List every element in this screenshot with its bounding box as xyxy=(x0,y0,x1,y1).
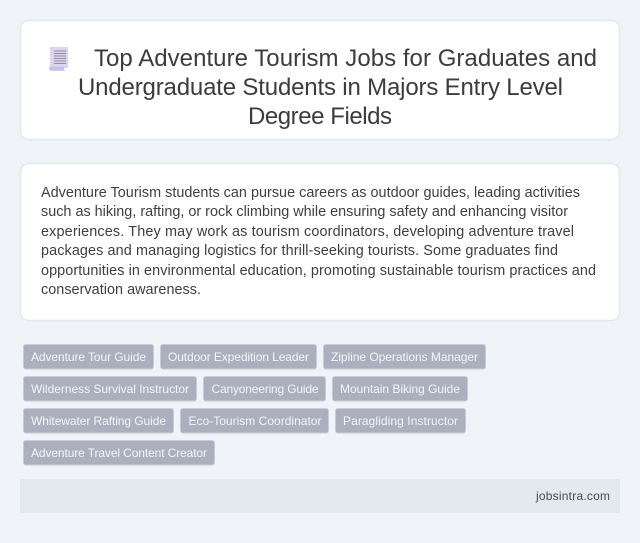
tag: Adventure Travel Content Creator: Adventure Travel Content Creator xyxy=(31,446,207,460)
tag: Whitewater Rafting Guide xyxy=(24,408,174,433)
description text: packages and managing logistics for thrill-seeking tourists. Some graduates find xyxy=(41,243,558,259)
panel: title xyxy=(20,20,620,140)
tag: Whitewater Rafting Guide: Whitewater Rafting Guide xyxy=(31,414,166,428)
tag: Outdoor Expedition Leader: Outdoor Expedition Leader xyxy=(168,350,309,364)
tag: Adventure Travel Content Creator xyxy=(24,440,214,465)
tag: Zipline Operations Manager: Zipline Operations Manager xyxy=(331,350,478,364)
description text: opportunities in environmental education, promoting sustainable tourism practices and xyxy=(41,263,596,279)
tag: Mountain Biking Guide xyxy=(332,376,468,401)
description text xyxy=(41,185,596,298)
tag: Wilderness Survival Instructor: Wilderness Survival Instructor xyxy=(31,382,189,396)
title text: Degree Fields xyxy=(248,103,392,130)
tag: Outdoor Expedition Leader xyxy=(160,344,316,369)
description text: such as hiking, rafting, or rock climbing while ensuring safety and enhancing visitor xyxy=(41,204,568,220)
job tags xyxy=(24,344,486,465)
description text: Adventure Tourism students can pursue careers as outdoor guides, leading activities xyxy=(41,185,580,201)
tag: Paragliding Instructor: Paragliding Instructor xyxy=(343,414,458,428)
tag: Adventure Tour Guide: Adventure Tour Guide xyxy=(31,350,146,364)
tag: Wilderness Survival Instructor xyxy=(24,376,196,401)
footer text: jobsintra.com xyxy=(535,489,610,503)
icon: receipt scroll xyxy=(49,48,68,71)
tag: Canyoneering Guide: Canyoneering Guide xyxy=(212,382,319,396)
title text: Undergraduate Students in Majors Entry Level xyxy=(78,74,563,101)
footer xyxy=(20,479,620,513)
tag: Canyoneering Guide xyxy=(204,376,326,401)
tag: Eco-Tourism Coordinator xyxy=(180,408,328,433)
tag: Paragliding Instructor xyxy=(336,408,466,433)
tag: Zipline Operations Manager xyxy=(324,344,486,369)
tag: Mountain Biking Guide: Mountain Biking Guide xyxy=(340,382,460,396)
tag: Adventure Tour Guide xyxy=(24,344,154,369)
description text: conservation awareness. xyxy=(41,282,201,298)
title text xyxy=(78,45,597,130)
tag: Eco-Tourism Coordinator: Eco-Tourism Coordinator xyxy=(188,414,322,428)
title text: Top Adventure Tourism Jobs for Graduates and xyxy=(94,45,597,72)
panel: description xyxy=(20,164,620,320)
description text: experiences. They may work as tourism coordinators, developing adventure travel xyxy=(41,224,574,240)
